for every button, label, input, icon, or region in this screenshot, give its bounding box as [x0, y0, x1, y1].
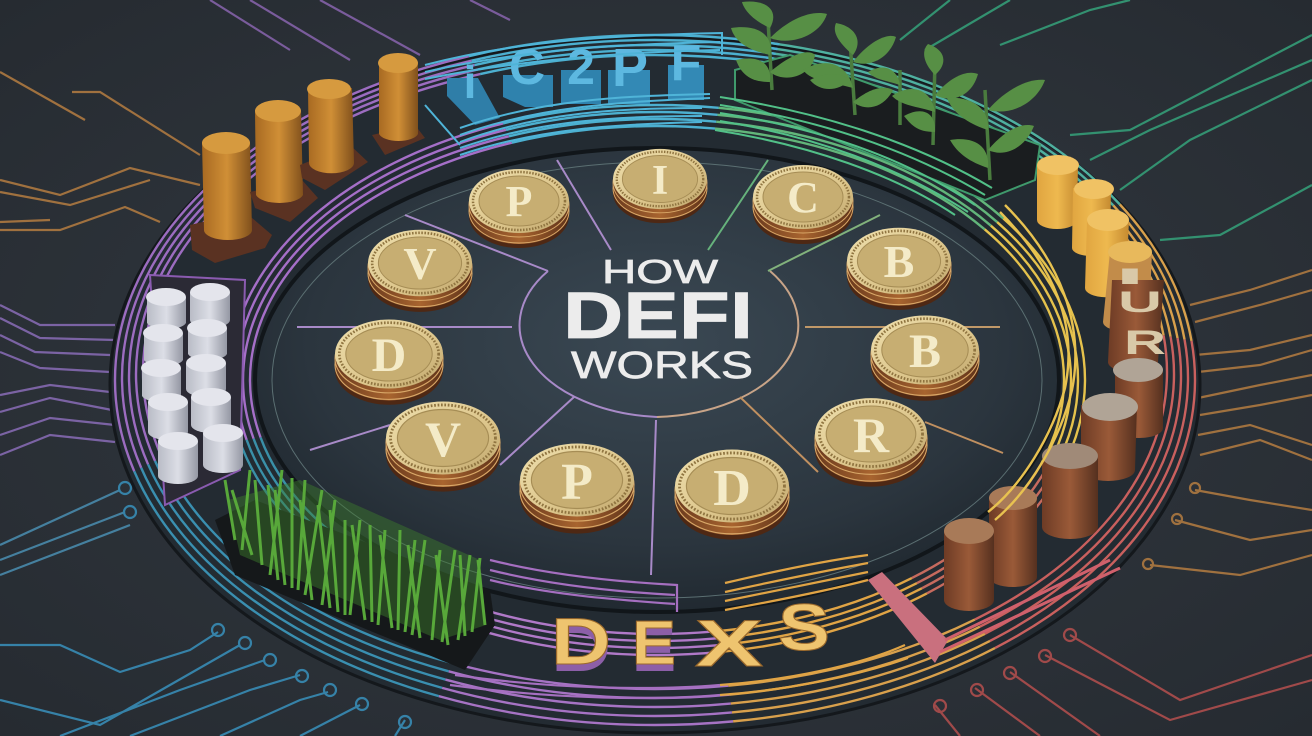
title: DEFI — [563, 278, 753, 352]
green bed rails — [715, 97, 992, 215]
circuit traces: top left — [0, 0, 510, 230]
outer ring traces — [115, 35, 1195, 725]
DEXS letters: E — [632, 609, 676, 678]
grass bed — [215, 470, 495, 670]
central disc — [255, 148, 1059, 612]
blue letter blocks: i — [464, 56, 476, 108]
yellow cylinders and wood pillars: I — [1115, 264, 1145, 289]
coin D left — [335, 319, 443, 405]
coin C — [753, 165, 853, 244]
red tray border — [868, 560, 1120, 663]
title — [563, 253, 753, 387]
DEXS letters — [551, 590, 830, 685]
coin P lower: P — [561, 454, 593, 511]
circuit traces: bottom right — [934, 629, 1312, 736]
coin R: R — [853, 407, 890, 463]
title: WORKS — [571, 345, 753, 387]
disc inner line — [272, 162, 1042, 598]
coin D: D — [713, 460, 751, 517]
coin B lower: B — [909, 325, 941, 378]
blue letter blocks: P — [612, 38, 648, 98]
platform ring — [110, 37, 1200, 733]
circuit traces: top right — [900, 0, 1312, 240]
title: HOW — [602, 253, 719, 290]
yellow cylinders and wood pillars — [944, 155, 1166, 611]
coin I — [613, 149, 707, 223]
coin V lower: V — [425, 411, 461, 467]
coin C: C — [787, 173, 819, 222]
DEXS letters: S — [778, 590, 830, 664]
blue letter blocks: 2 — [567, 39, 595, 95]
blue letter blocks: C — [509, 39, 545, 95]
coin V lower — [386, 402, 500, 492]
yellow inner rails — [988, 205, 1075, 520]
DEXS letters: X — [695, 606, 763, 680]
coin B lower — [871, 315, 979, 401]
coin P lower — [520, 444, 634, 534]
coin D left: D — [372, 329, 406, 382]
coin B upper — [847, 228, 951, 310]
orange token stacks — [190, 53, 425, 263]
coin D — [675, 450, 789, 540]
blue letter blocks — [447, 35, 704, 125]
yellow cylinders and wood pillars: U — [1118, 286, 1162, 319]
DEXS letters: E — [632, 616, 676, 685]
bottom front rails — [450, 555, 908, 698]
DEXS letters: D — [551, 611, 611, 685]
coin V upper — [368, 230, 472, 312]
coin P — [469, 169, 569, 248]
coin P: P — [506, 177, 532, 226]
plant bed — [731, 2, 1045, 200]
DEXS letters: D — [551, 604, 611, 678]
circuit traces: left side — [0, 305, 130, 575]
circuit traces: bottom left — [0, 482, 411, 736]
inner ring traces — [229, 105, 1085, 655]
circuit traces: right side — [1143, 270, 1312, 575]
coin I: I — [652, 158, 668, 204]
white cylinders tray — [141, 275, 245, 505]
blue bands over blocks — [425, 33, 722, 155]
blue letter blocks: F — [671, 35, 701, 91]
coin R — [815, 398, 927, 487]
coin V upper: V — [403, 238, 437, 289]
hub ring with spokes — [297, 160, 1003, 575]
yellow cylinders and wood pillars: R — [1124, 324, 1166, 362]
coin B upper: B — [884, 236, 914, 287]
